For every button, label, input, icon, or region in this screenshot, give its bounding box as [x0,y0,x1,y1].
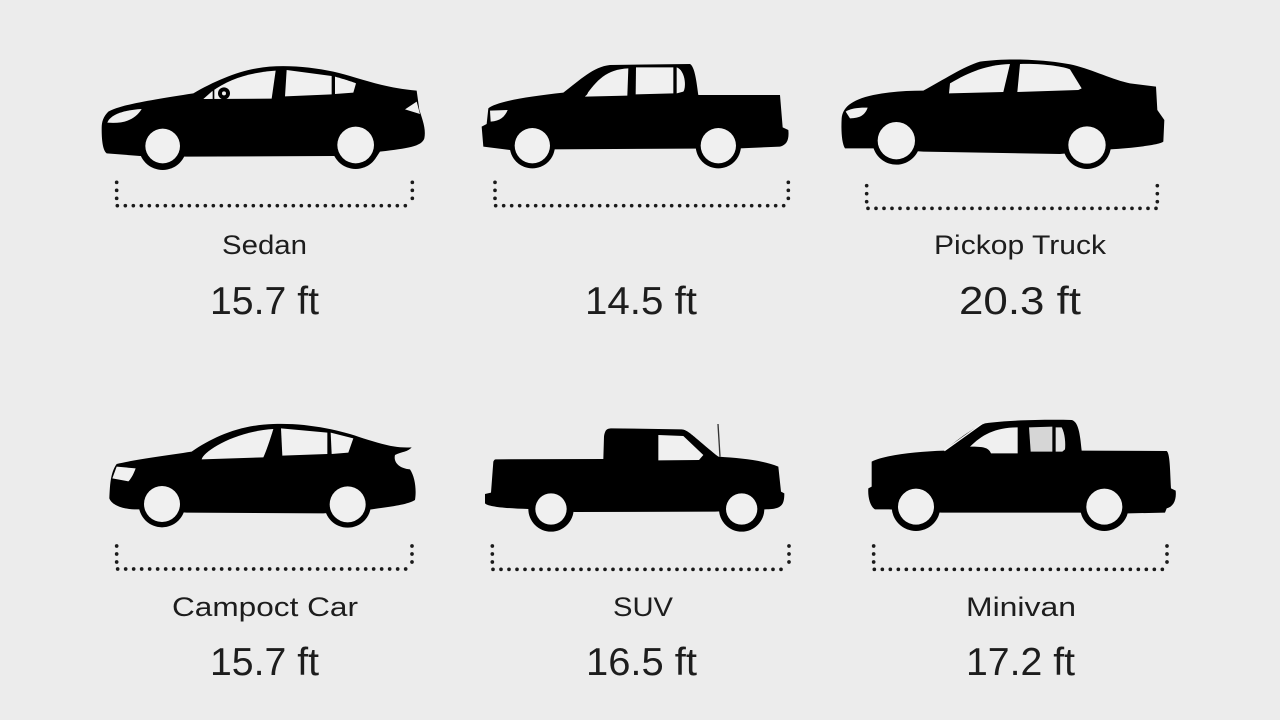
icon: sedan-style silhouette [841,59,1164,169]
value: minivan length: 17.2 ft [966,641,1075,684]
label: sedan: Sedan [222,230,307,260]
icon: pickup silhouette with antenna [485,424,784,532]
label: compact car: Campoct Car [172,592,358,622]
label: suv: SUV [613,592,673,622]
icon: crew cab pickup silhouette [482,64,789,168]
icon: compact car silhouette [109,424,416,528]
panel: minivan [868,420,1176,684]
icon: crew cab silhouette [868,420,1176,531]
dimension bracket: pickup truck [867,186,1157,208]
value: pickup truck length: 20.3 ft [959,280,1081,323]
panel: unnamed pickup [482,64,789,323]
panel: compact car [109,424,416,684]
dimension bracket: minivan [874,546,1167,569]
label: pickup truck: Pickop Truck [934,230,1107,260]
dimension bracket: pickup [495,182,788,206]
dimension bracket: sedan [117,182,412,206]
panel: suv [485,424,789,684]
panel: sedan [102,66,425,323]
dimension bracket: suv [492,546,789,569]
value: compact car length: 15.7 ft [210,641,319,684]
value: suv length: 16.5 ft [586,641,697,684]
dimension bracket: compact car [117,546,412,569]
panel: pickup truck [841,59,1164,323]
label: minivan: Minivan [966,592,1076,622]
icon: sedan silhouette [102,66,425,170]
value: sedan length: 15.7 ft [210,280,319,323]
value: pickup length: 14.5 ft [585,280,697,323]
